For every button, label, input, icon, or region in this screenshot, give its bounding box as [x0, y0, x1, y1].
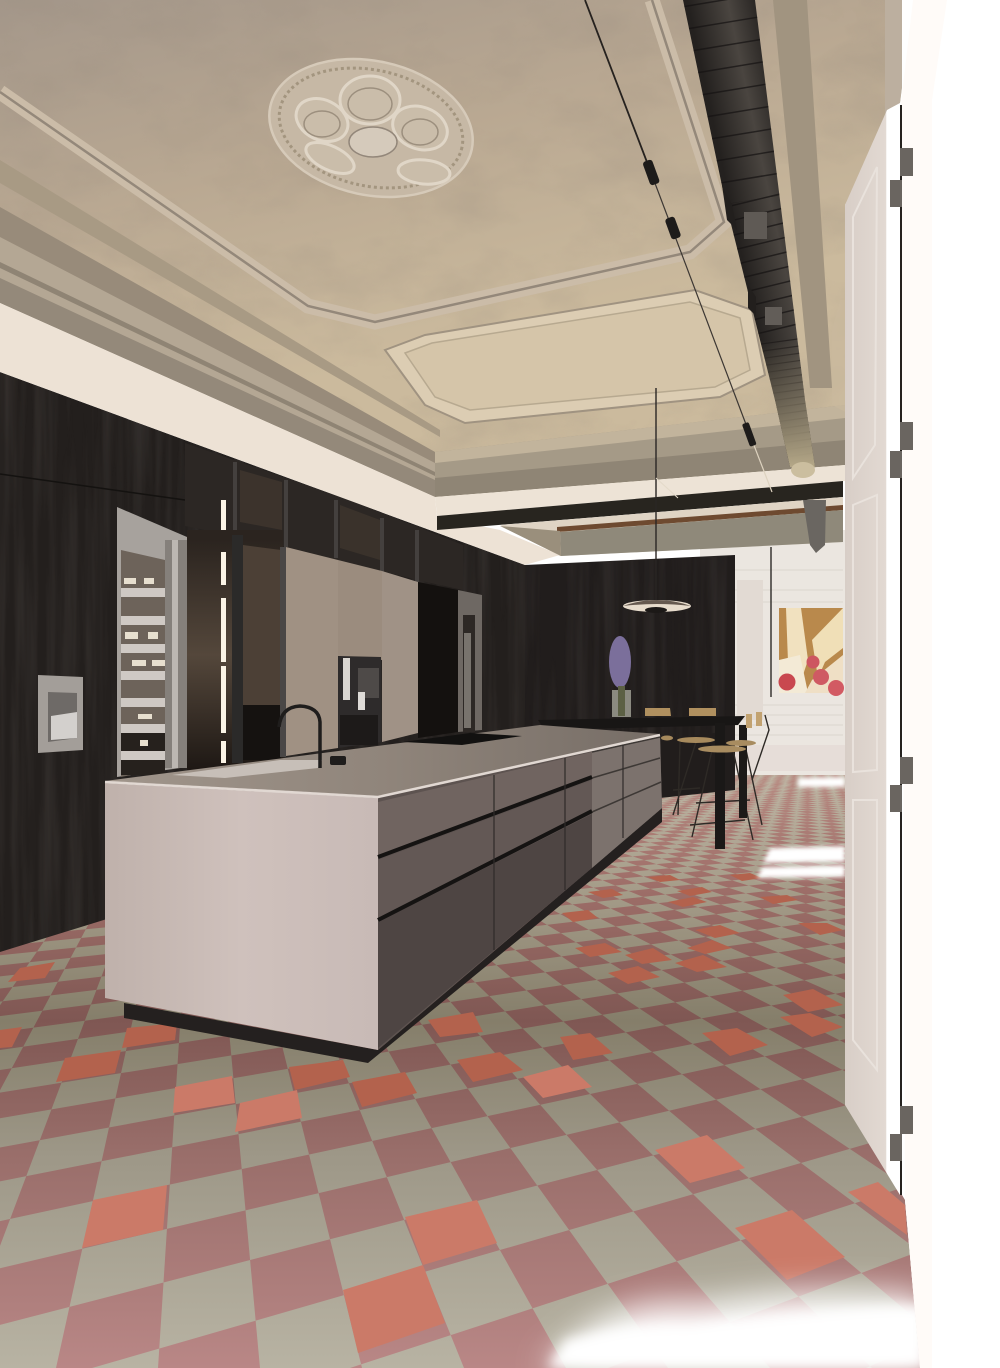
- kitchen island: [105, 706, 662, 1063]
- island front face: [105, 783, 378, 1050]
- wall panel appliance: [38, 675, 83, 753]
- back doorway: [737, 580, 763, 720]
- built-in oven: [338, 656, 381, 748]
- coral tiles, foreground: [82, 1065, 907, 1353]
- ceiling track light: [585, 0, 772, 492]
- glass tall cabinet with light strip: [187, 500, 286, 770]
- faucet: [279, 706, 320, 768]
- ceiling: [0, 0, 913, 500]
- upper back ceiling: [500, 497, 843, 556]
- beige tall cabinets: [286, 547, 418, 756]
- ornamental right band: [773, 0, 832, 388]
- coral tiles, distance: [0, 873, 843, 1107]
- island side drawers: [378, 735, 662, 1050]
- island plinth: [124, 808, 662, 1063]
- floor: checkerboard tiles: [0, 775, 920, 1368]
- ventilation duct: [680, 0, 820, 478]
- painting: [778, 608, 844, 696]
- rear cornice: [500, 510, 843, 556]
- wall wire: [770, 547, 772, 697]
- back brick wall: [700, 530, 850, 775]
- far right wall strip: [885, 0, 902, 114]
- left dark wood wall: [0, 372, 525, 952]
- wooden ceiling beam: [557, 505, 843, 532]
- sink: [172, 760, 322, 778]
- upper glass cabinet band: [185, 443, 463, 590]
- ceiling octagon panel: [385, 290, 765, 423]
- ceiling back cornice: [435, 405, 845, 497]
- lavender vase: [609, 636, 631, 717]
- dining table and stools: [538, 708, 769, 849]
- ceiling left cornice: [0, 207, 435, 497]
- right white door frame: [901, 0, 1000, 1368]
- open door leaf: [845, 103, 900, 1195]
- dark cabinet and wine fridge, right: [418, 582, 482, 738]
- back dark wall block: [525, 555, 735, 798]
- wine fridge, left: [117, 507, 187, 777]
- mixer: [330, 756, 346, 765]
- steel beam: [437, 481, 843, 530]
- sunlight on floor: [540, 777, 925, 1368]
- lower duct segment: [803, 500, 826, 553]
- pendant lamp: [623, 388, 691, 613]
- induction hob: [403, 733, 522, 745]
- duct vents: [722, 185, 782, 325]
- ornate strip, left: [0, 160, 440, 437]
- white wall band, left: [0, 303, 560, 565]
- ceiling medallion: [256, 41, 486, 215]
- door hinges: [890, 148, 913, 1161]
- white band above beam: [435, 465, 845, 516]
- island worktop: [105, 725, 660, 796]
- ceiling main moulding: [0, 0, 724, 322]
